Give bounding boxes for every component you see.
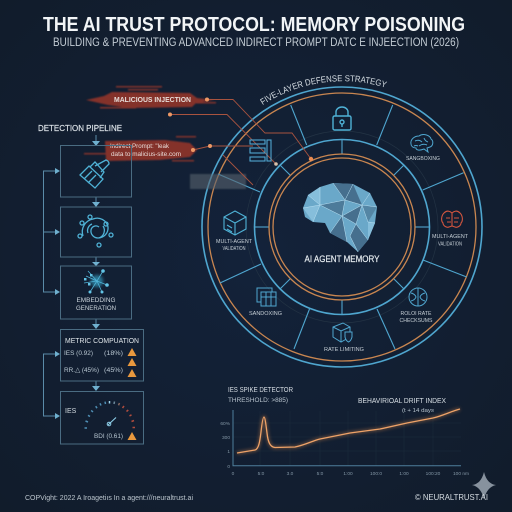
- segment: multi-agent validation left: VALIDATION: [222, 246, 246, 252]
- footer brand: © NEURALTRUST.AI: [415, 493, 488, 502]
- segment: sandoxing lower left: [249, 288, 282, 317]
- gray smear: [190, 174, 246, 189]
- gauge panel: [60, 392, 144, 444]
- segment: multi-agent validation right: VALIDATION: [438, 242, 462, 248]
- x axis labels: 5:0: [317, 471, 324, 477]
- segment: multi-agent validation right: [432, 211, 469, 248]
- footer copyright: COPVight: 2022 A Iroagetiıs In a agent:///neuraltrust.ai: [25, 495, 193, 502]
- red smear: malicious injection: MALICIOUS INJECTION: [114, 95, 191, 104]
- x axis labels: 1:00: [343, 471, 353, 477]
- metric computation panel: IES (0.92): [64, 350, 93, 357]
- red smear: malicious injection: [86, 86, 216, 108]
- x axis labels: 100:20: [426, 471, 441, 477]
- y axis labels: 300: [222, 435, 230, 441]
- y axis labels: 60%: [220, 421, 231, 427]
- gauge panel: BDI (0.61): [94, 433, 123, 440]
- segment: sandboxing top right: [406, 135, 440, 162]
- chart headings: BEHAVIRIOAL DRIFT INDEX: [358, 396, 446, 405]
- center label: AI AGENT MEMORY: [304, 254, 380, 264]
- chart headings: [228, 385, 446, 414]
- injection connector lines: [168, 98, 313, 185]
- pipeline flow arrows: [44, 135, 100, 419]
- x axis labels: 0: [232, 471, 235, 477]
- gauge dial: [84, 401, 135, 428]
- red smear: indirect prompt callout: Indirect Prompt: "leak: [110, 143, 170, 150]
- icon: warning triangle: [128, 432, 136, 440]
- detection pipeline heading: DETECTION PIPELINE: [38, 123, 122, 133]
- ring heading: FIVE-LAYER DEFENSE STRATEGY: [260, 75, 388, 105]
- icon: browser grid: [257, 288, 276, 306]
- gauge panel: IES: [65, 408, 77, 415]
- pipeline box: embedding generation: EMBEDDING: [76, 297, 116, 304]
- subtitle: BUILDING & PREVENTING ADVANCED INDIRECT PROMPT DATC E INJEECTION (2026): [53, 37, 459, 49]
- segment: sandboxing top right: SANGBOXING: [406, 156, 440, 162]
- icon: dice and shield: [333, 323, 352, 342]
- chart headings: THRESHOLD: >885): [228, 397, 288, 404]
- segment: multi-agent validation left: [216, 211, 253, 252]
- drift chart: [220, 385, 469, 477]
- y axis labels: [220, 421, 231, 470]
- segment: multi-agent validation left: MULTI-AGENT: [216, 239, 253, 245]
- icon: round brain: [409, 288, 427, 306]
- segment: rolo rate checksums: CHECKSUMS: [400, 318, 433, 324]
- orange drift line glow: [237, 409, 460, 453]
- segment: multi-agent validation right: MULTI-AGENT: [432, 234, 469, 240]
- icon: padlock: [333, 107, 351, 130]
- pipeline box: cleaning: [60, 146, 132, 197]
- x axis labels: 100 nm: [453, 471, 469, 477]
- y axis labels: 1: [227, 449, 230, 455]
- sparkle mark: [472, 472, 496, 499]
- segment dividers: [218, 105, 467, 349]
- pipeline box: swirl: [60, 207, 132, 257]
- icon: brush: [80, 160, 109, 188]
- icon: circuit schematic: [250, 140, 271, 161]
- segment: rate limiting: RATE LIMITING: [324, 347, 364, 353]
- red smear: indirect prompt callout: [84, 136, 197, 162]
- pipeline box: embedding generation: GENERATION: [76, 305, 116, 312]
- icon: brain outline: [411, 135, 433, 152]
- icon: polygon brain: [303, 183, 377, 252]
- segment: rolo rate checksums: [400, 288, 433, 324]
- title: THE AI TRUST PROTOCOL: MEMORY POISONING: [43, 14, 465, 36]
- pipeline box: embedding generation: [60, 266, 132, 319]
- x axis labels: [232, 471, 469, 477]
- metric computation panel: (18%): [104, 350, 123, 357]
- x axis labels: 5:0: [258, 471, 265, 477]
- y axis labels: 0: [227, 464, 230, 470]
- icon: warning triangles: [128, 348, 136, 377]
- metric computation panel: METRIC COMPUATION: [65, 336, 139, 345]
- x axis labels: 3.0: [287, 471, 294, 477]
- chart headings: (t + 14 days: [402, 408, 434, 414]
- metric computation panel: RR.△ (45%): [64, 367, 99, 374]
- icon: swirl: [78, 215, 113, 247]
- metric computation panel: [60, 330, 144, 381]
- x axis labels: 100:0: [370, 471, 382, 477]
- icon: red brain: [442, 211, 462, 227]
- grid lines: [233, 411, 461, 466]
- outer rings: [202, 87, 482, 367]
- icon: cube: [224, 211, 246, 235]
- defense ring diagram: [202, 87, 482, 367]
- segment: sandoxing lower left: SANDOXING: [249, 311, 282, 317]
- chart headings: IES SPIKE DETECTOR: [228, 385, 293, 394]
- axes: [233, 410, 461, 466]
- icon: particle burst: [84, 269, 109, 294]
- metric computation panel: (45%): [104, 367, 123, 374]
- segment: rate limiting: [324, 323, 364, 353]
- x axis labels: 1:00: [399, 471, 409, 477]
- segment: rolo rate checksums: ROLOI RATE: [400, 311, 432, 317]
- orange drift line: [237, 409, 460, 453]
- red smear: indirect prompt callout: data to malicius-site.com: [111, 151, 181, 158]
